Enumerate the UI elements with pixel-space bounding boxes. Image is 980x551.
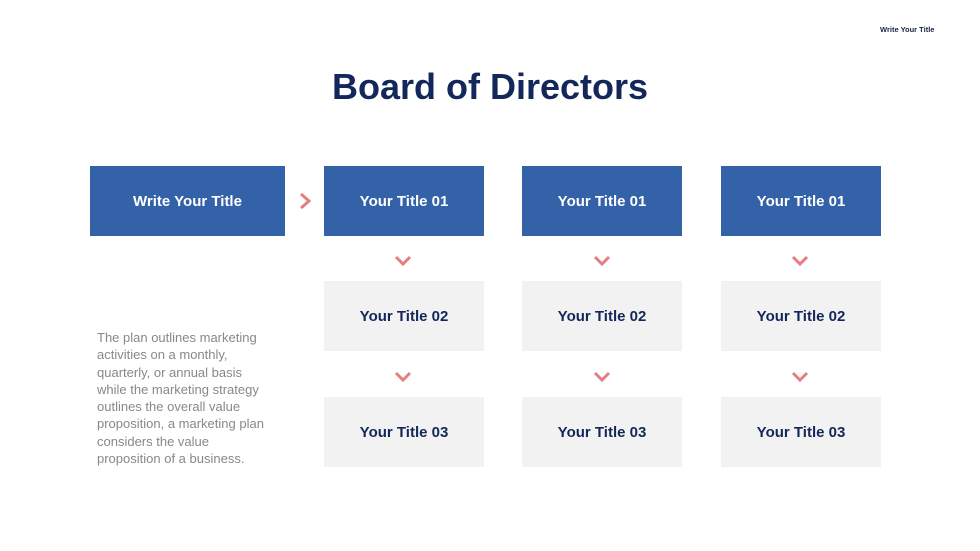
column 1 xyxy=(324,166,484,467)
text block: outlines the overall value xyxy=(97,399,240,414)
text block: while the marketing strategy xyxy=(97,382,259,397)
icon: right chevron xyxy=(300,193,312,209)
column 1: Your Title 03 xyxy=(360,424,448,440)
header label: Write Your Title xyxy=(880,25,934,34)
column 1: Your Title 02 xyxy=(360,308,448,324)
text block xyxy=(97,330,264,466)
column 3 xyxy=(721,166,881,467)
column 2: Your Title 02 xyxy=(558,308,646,324)
text block: proposition, a marketing plan xyxy=(97,416,264,431)
column 2: Your Title 01 xyxy=(558,192,646,210)
column 1: Your Title 01 xyxy=(360,192,448,210)
column 3: Your Title 02 xyxy=(757,308,845,324)
title: Board of Directors xyxy=(332,66,648,107)
column 3: Your Title 03 xyxy=(757,424,845,440)
column 2: Your Title 03 xyxy=(558,424,646,440)
text block: quarterly, or annual basis xyxy=(97,365,242,380)
text block: proposition of a business. xyxy=(97,451,244,466)
left box xyxy=(90,166,285,236)
text block: The plan outlines marketing xyxy=(97,330,257,345)
text block: activities on a monthly, xyxy=(97,347,228,362)
column 2 xyxy=(522,166,682,467)
text block: considers the value xyxy=(97,434,209,449)
column 3: Your Title 01 xyxy=(757,192,845,210)
left box: Write Your Title xyxy=(133,192,242,210)
